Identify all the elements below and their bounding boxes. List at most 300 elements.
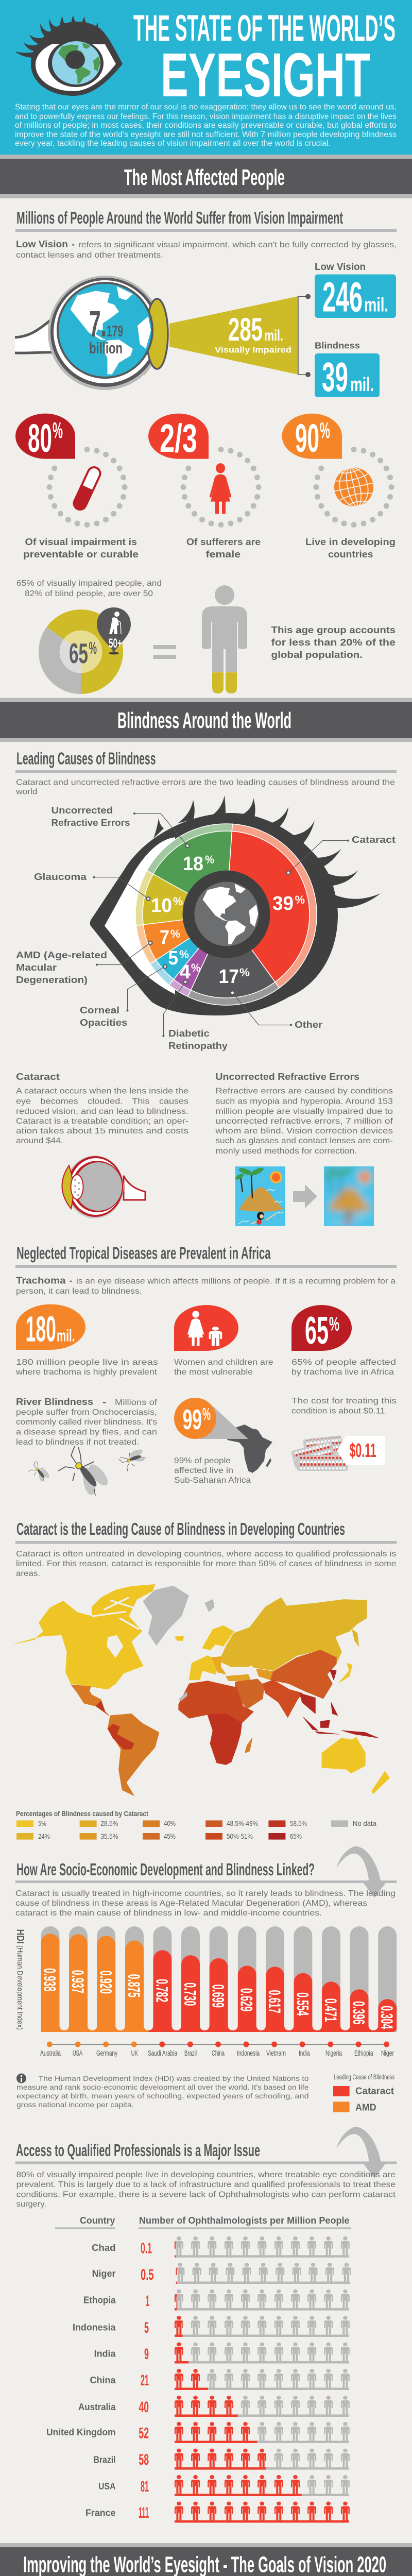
- caption: affected live in: [174, 1466, 233, 1475]
- country labels: [40, 2049, 394, 2058]
- text: socio-economic intro: cataract is the main cause of blindness in low- and middle-income countries.: [15, 1909, 322, 1918]
- label: Diabetic Retinopathy: Retinopathy: [168, 1040, 228, 1051]
- pupil with globe: [182, 871, 270, 958]
- text: leading causes intro: [15, 778, 395, 796]
- row: Indonesia: Indonesia: [73, 2322, 116, 2333]
- text: river blindness: -: [102, 1396, 106, 1407]
- row: Brazil: [94, 2449, 350, 2470]
- HDI values: 0.471: [321, 1998, 340, 2022]
- connector: [298, 294, 311, 377]
- section banner: The Most Affected People: The Most Affected People: [124, 165, 285, 190]
- text: age group share: global population.: [271, 649, 363, 660]
- text: monly used methods for correction.: [215, 1147, 357, 1156]
- note text: measure and rank socio-economic development all over the world. It's based on life: [16, 2083, 309, 2091]
- price tag: $0.11: [350, 1440, 376, 1462]
- text: access intro: [16, 2171, 396, 2209]
- text: access intro: prevalent. This is largely due to a lack of infrastructure and qualified professionals to treat these: [16, 2180, 396, 2189]
- stat: 180 mil: where trachoma is highly prevalent: [15, 1368, 157, 1377]
- image: clear island view: [234, 1166, 285, 1226]
- note text: The Human Development Index (HDI) was created by the United Nations to: [38, 2074, 309, 2082]
- row: Australia: [78, 2396, 350, 2417]
- heading: Access to Qualified Professionals: Access to Qualified Professionals is a Major Issue: [16, 2141, 260, 2160]
- HDI values: 0.938: [41, 1968, 59, 1992]
- caption: female: [206, 549, 241, 560]
- text: river blindness: commonly called river blindness. It's: [16, 1418, 157, 1427]
- percentages: [151, 853, 305, 988]
- country labels: Australia: [40, 2049, 61, 2058]
- panel: Cataract explanation: [16, 1071, 188, 1218]
- country labels: Saudi Arabia: [148, 2049, 177, 2058]
- table header: Country: [80, 2215, 115, 2226]
- row: United Kingdom: [46, 2422, 350, 2443]
- HDI values: [41, 1968, 396, 2029]
- panel: age group: [16, 579, 396, 694]
- row: United Kingdom: United Kingdom: [46, 2427, 115, 2437]
- light cone: visually impaired: [169, 296, 298, 375]
- label: Other: Other: [295, 1019, 322, 1030]
- text: age group share: This age group accounts: [271, 624, 396, 635]
- text: trachoma definition: is an eye disease which affects millions of people. If it is a recurring problem for a: [76, 1277, 396, 1286]
- stat: low vision 246 mil: mil.: [364, 295, 388, 316]
- text: access intro: conditions. For example, there is a severe lack of Ophthalmologists who can perform cataract: [16, 2190, 396, 2199]
- light cone: visually impaired: Visually Impaired: [215, 345, 291, 354]
- dotted ring: [46, 447, 128, 528]
- text: age group share: for less than 20% of the: [271, 637, 396, 648]
- text: eye becomes clouded. This causes: [16, 1097, 188, 1106]
- text: low vision definition: refers to significant visual impairment, which can't be fully corrected by glasses,: [78, 241, 397, 249]
- percentages: %: [239, 966, 250, 979]
- section banner: The Most Affected People: [0, 155, 412, 198]
- heading: Socio-Economic Development: [15, 1846, 397, 1898]
- percentages: 17: [218, 966, 239, 988]
- percentages: 39: [272, 893, 294, 914]
- icon: side-view eye: [15, 276, 168, 390]
- stat: 65% in Africa: %: [329, 1313, 339, 1335]
- intro text: Stating that our eyes are the mirror of our soul is no exaggeration: they allow us to see the world around us,: [15, 103, 397, 112]
- text: cataract map intro: Cataract is often untreated in developing countries, where access to qualified professionals is: [16, 1550, 397, 1558]
- stat: 80% preventable: [15, 414, 139, 560]
- drop: 90%: %: [320, 418, 330, 443]
- stat: low vision 246 mil: 246: [322, 274, 363, 320]
- drop: 90%: [282, 414, 342, 461]
- text: age group share: [271, 624, 396, 660]
- drop: 2/3: 2/3: [160, 416, 197, 461]
- label: AMD: [16, 950, 107, 985]
- label: Corneal Opacities: [80, 1005, 128, 1028]
- intro text: every year, tackling the leading causes of vision impairment all over the world is crucial.: [15, 139, 331, 148]
- row: Indonesia: 5: [144, 2319, 149, 2336]
- HDI values: 0.304: [377, 2006, 396, 2029]
- text: leading causes intro: world: [15, 788, 37, 796]
- row: Chad: Chad: [92, 2242, 115, 2253]
- stat: 180 mil: 180 million people live in areas: [16, 1358, 158, 1367]
- text: [215, 1087, 393, 1156]
- heading: Leading Causes: Leading Causes of Blindness: [16, 749, 156, 768]
- text: Refractive errors are caused by conditions: [215, 1087, 393, 1096]
- text: Cataract is a treatable condition; an oper-: [16, 1117, 188, 1126]
- axis label: (Human Development Index): [15, 1945, 24, 2030]
- timeline dots: [47, 2041, 389, 2047]
- stat: women and children: the most vulnerable: [174, 1368, 253, 1377]
- note text: expectancy at birth, mean years of schooling, expected years of schooling, and: [16, 2092, 309, 2100]
- text: low vision definition: -: [72, 239, 75, 249]
- legend: leading cause of blindness: Cataract: [355, 2086, 394, 2096]
- light cone: visually impaired: 285: [228, 312, 263, 348]
- text: such as myopia and hyperopia. Around 153: [215, 1097, 393, 1106]
- percentages: %: [205, 853, 214, 866]
- caption: [305, 536, 396, 560]
- stat: 99% sub-saharan africa: [174, 1398, 272, 1485]
- country labels: Nigeria: [325, 2049, 342, 2058]
- row: Brazil: Brazil: [94, 2454, 115, 2465]
- row: Niger: Niger: [92, 2268, 115, 2279]
- legend: leading cause of blindness: AMD: [355, 2102, 376, 2112]
- bubble: [174, 1398, 216, 1439]
- HDI values: 0.617: [265, 1990, 284, 2013]
- text: 65% over 50: 65% of visually impaired people, and: [16, 579, 162, 588]
- drop: 90%: 90: [295, 416, 319, 461]
- equals sign: [153, 645, 176, 659]
- beam: [200, 1406, 248, 1439]
- icon: pill: [71, 464, 104, 513]
- legend: cataract percentages: Percentages of Blindness caused by Cataract: [16, 1809, 148, 1818]
- stat: blindness 39 mil: Blindness: [315, 340, 360, 350]
- stat: low vision 246 mil: [315, 262, 396, 320]
- icon: info: [16, 2073, 26, 2083]
- label: AMD: AMD (Age-related: [16, 950, 107, 960]
- percentages: %: [170, 927, 180, 940]
- icon: person with yellow legs: [202, 585, 247, 693]
- stat: 90% developing countries: [282, 414, 396, 560]
- text: socio-economic intro: Cataract is usually treated in high-income countries, so it rarely leads to blindness. The leading: [15, 1889, 396, 1898]
- table header: [55, 2215, 351, 2229]
- labels: 45%: [164, 1832, 176, 1840]
- stat: 65% in Africa: by trachoma live in Africa: [291, 1368, 394, 1377]
- arrow: [293, 1184, 317, 1208]
- arrow: curved: [336, 2127, 386, 2178]
- world population figure: 179: [107, 322, 123, 340]
- labels: 48.5%-49%: [227, 1819, 258, 1827]
- text: low vision definition: [16, 239, 397, 260]
- label: Diabetic Retinopathy: Diabetic: [168, 1028, 210, 1039]
- text: low vision definition: contact lenses and other treatments.: [16, 251, 163, 260]
- stat: 65% in Africa: [291, 1305, 396, 1377]
- heading: Access to Qualified Professionals: [15, 2127, 397, 2178]
- icon: 50+ pin: [97, 607, 131, 654]
- percentages: 4: [179, 961, 191, 983]
- country labels: USA: [73, 2049, 82, 2058]
- panel: header: [0, 0, 412, 155]
- text: river blindness: Millions of: [115, 1398, 158, 1407]
- HDI values: 0.920: [96, 1971, 115, 1994]
- HDI values: 0.875: [125, 1974, 143, 1997]
- swatches: [16, 1820, 348, 1840]
- heading: Cataract: [16, 1071, 60, 1082]
- labels: 58.5%: [290, 1819, 307, 1827]
- percentages: 5: [168, 947, 178, 969]
- stat: 65% in Africa: 65% of people affected: [291, 1358, 396, 1367]
- stat: 2/3 female: [148, 414, 262, 560]
- map: Africa: [227, 1425, 272, 1473]
- legend: leading cause of blindness: [333, 2073, 394, 2112]
- label: Uncorrected Refractive Errors: Uncorrected: [52, 805, 113, 816]
- stat: low vision 246 mil: Low Vision: [315, 262, 366, 273]
- HDI values: 0.699: [209, 1985, 228, 2008]
- text: cataract map intro: areas.: [16, 1569, 40, 1578]
- text: trachoma definition: person, it can lead to blindness.: [16, 1287, 142, 1296]
- intro text: and to powerfully express our feelings. For this reason, vision impairment has a disruptive impact on the lives: [15, 112, 397, 121]
- label: Uncorrected Refractive Errors: Refractive Errors: [52, 817, 130, 828]
- labels: 65%: [290, 1832, 302, 1840]
- labels: 35.5%: [100, 1832, 118, 1840]
- label: AMD: Degeneration): [16, 974, 88, 985]
- text: river blindness: [16, 1396, 158, 1447]
- country labels: Germany: [96, 2049, 117, 2058]
- eyelid and lashes: [90, 795, 381, 1015]
- chart: 65% pie: %: [89, 638, 97, 657]
- labels: 28.5%: [100, 1819, 118, 1827]
- country labels: Niger: [381, 2049, 394, 2058]
- stat: women and children: [174, 1305, 273, 1377]
- text: leading causes intro: Cataract and uncorrected refractive errors are the two leading causes of blindness around the: [16, 778, 395, 787]
- percentages: 10: [151, 895, 172, 917]
- row: China: 21: [141, 2372, 149, 2389]
- text: The cost for treating this: [291, 1397, 397, 1405]
- text: such as glasses and contact lenses are com-: [215, 1137, 393, 1145]
- pie segments outer band: [135, 824, 317, 1005]
- icon: cataract eye: [62, 1156, 145, 1218]
- image: blurred island view: [323, 1166, 374, 1226]
- intro text: of millions of people; in most cases, their conditions are easily preventable or curable, but global efforts to: [15, 121, 397, 130]
- text: river blindness: a disease spread by flies, and can: [16, 1428, 157, 1436]
- HDI values: 0.730: [181, 1982, 199, 2006]
- icon: eye with globe: [15, 15, 123, 96]
- HDI values: 0.554: [293, 1992, 312, 2016]
- row: China: China: [90, 2375, 116, 2385]
- stat: blindness 39 mil: mil.: [350, 374, 374, 396]
- labels: No data: [353, 1819, 376, 1827]
- axis label: HDI: [14, 1929, 26, 1944]
- text: trachoma definition: -: [70, 1275, 72, 1286]
- country labels: UK: [131, 2049, 138, 2058]
- text: trachoma definition: Trachoma: [16, 1275, 66, 1286]
- chart: 65% pie: 65: [69, 637, 88, 669]
- row: France: France: [85, 2507, 115, 2518]
- gaps between bars: [60, 1926, 378, 2030]
- text: cataract map intro: limited. For this reason, cataract is responsible for more than 50% of cases of blindness in some: [16, 1560, 397, 1568]
- text: around $44.: [16, 1137, 63, 1145]
- drop: 80%: [15, 414, 75, 461]
- caption: [23, 536, 139, 560]
- label: Glaucoma: Glaucoma: [34, 871, 87, 882]
- pie segments inner: [143, 831, 310, 998]
- AMD bars: [41, 1934, 148, 2032]
- country labels: Ethiopia: [354, 2049, 373, 2058]
- text: trachoma definition: [16, 1275, 396, 1296]
- stat: treatment cost: [291, 1397, 397, 1471]
- labels: 5%: [38, 1819, 46, 1827]
- chart: 65% pie: [39, 609, 123, 694]
- world population figure: billion: [89, 339, 123, 357]
- text: [291, 1397, 397, 1416]
- table: ophthalmologists per million: [46, 2215, 351, 2522]
- HDI values: 0.937: [68, 1970, 87, 1993]
- HDI values: 0.629: [237, 1988, 256, 2011]
- text: uncorrected refractive errors, 7 million of: [215, 1117, 393, 1126]
- country labels: Brazil: [184, 2049, 197, 2058]
- row: Chad: [92, 2236, 350, 2258]
- label: Corneal Opacities: Corneal: [80, 1005, 119, 1015]
- intro text: [15, 103, 397, 148]
- row: Niger: 0.5: [141, 2266, 153, 2283]
- world population figure: [89, 304, 123, 357]
- section banner: Improving the World's Eyesight: [0, 2543, 412, 2576]
- labels: 24%: [38, 1832, 50, 1840]
- caption: preventable or curable: [23, 549, 139, 560]
- price tag: [337, 1436, 385, 1465]
- arrow: curved: [336, 1846, 386, 1898]
- light cone: visually impaired: mil.: [264, 327, 283, 344]
- text: river blindness: River Blindness: [16, 1396, 93, 1407]
- percentages: 7: [160, 927, 169, 948]
- country labels: Vietnam: [266, 2049, 286, 2058]
- bubble: %: [202, 1404, 211, 1423]
- row: Chad: 0.1: [141, 2240, 152, 2257]
- legend: cataract percentages: [16, 1809, 376, 1840]
- text: condition is about $0.11: [291, 1406, 385, 1416]
- icon: wire globe: [331, 464, 377, 511]
- labels: [38, 1819, 376, 1840]
- row: Australia: 40: [139, 2399, 149, 2416]
- caption: Sub-Saharan Africa: [174, 1476, 251, 1485]
- caption: Live in developing: [305, 536, 396, 547]
- bubble: 99: [183, 1403, 202, 1435]
- label: Corneal Opacities: Opacities: [80, 1017, 128, 1028]
- row: United Kingdom: 52: [139, 2425, 149, 2442]
- background columns: [41, 1926, 397, 2032]
- row: Ethopia: Ethopia: [83, 2295, 116, 2305]
- row: USA: 81: [141, 2478, 149, 2495]
- heading: Leading Causes: [15, 749, 397, 773]
- table header: Number of Ophthalmologists per Million People: [139, 2215, 350, 2226]
- diagram: world population eye: [15, 262, 396, 400]
- intro text: improve the state of the world’s eyesight are still not sufficient. With 7 million people developing blindness: [15, 130, 397, 139]
- stat: 180 mil: [15, 1304, 158, 1377]
- percentages: %: [173, 895, 183, 908]
- text: 65% over 50: [16, 579, 162, 598]
- caption: Of sufferers are: [186, 536, 261, 547]
- stat: 180 mil: mil.: [57, 1326, 75, 1345]
- row: India: India: [94, 2348, 116, 2359]
- percentages: %: [179, 948, 189, 961]
- map: world cataract blindness: [14, 1584, 389, 1795]
- caption: Of visual impairment is: [25, 536, 137, 547]
- row: Niger: [92, 2263, 351, 2284]
- note text: gross national income per capita.: [16, 2100, 134, 2109]
- icon: woman and child: [187, 1311, 222, 1346]
- text: reduced vision, and can lead to blindness.: [16, 1107, 188, 1116]
- dotted ring: [313, 447, 394, 528]
- country labels: China: [212, 2049, 225, 2058]
- text: [16, 1087, 188, 1145]
- text: 65% over 50: 82% of blind people, are over 50: [25, 589, 153, 598]
- stat: women and children: Women and children are: [174, 1358, 273, 1367]
- text: low vision definition: Low Vision: [16, 239, 68, 249]
- row: India: 9: [144, 2346, 149, 2363]
- row: France: 111: [139, 2504, 149, 2521]
- label: Uncorrected Refractive Errors: [52, 805, 130, 828]
- chart: eye-shaped pie of causes of blindness: [16, 795, 396, 1051]
- icon: flies: [28, 1442, 148, 1496]
- percentages: 18: [183, 853, 203, 875]
- drop: 2/3: [148, 414, 209, 461]
- row: India: [94, 2342, 350, 2364]
- icon: 50+ pin: 50+: [109, 636, 122, 651]
- chart: HDI bars: [14, 1926, 397, 2058]
- text: A cataract occurs when the lens inside the: [16, 1087, 188, 1096]
- stat: 65% in Africa: 65: [305, 1309, 329, 1352]
- row: USA: USA: [98, 2481, 115, 2492]
- HDI values: 0.396: [350, 2001, 368, 2025]
- caption: countries: [328, 549, 373, 560]
- text: socio-economic intro: cause of blindness in these areas is Age-Related Macular Degeneration (AMD), whereas: [15, 1899, 367, 1908]
- country labels: India: [299, 2049, 310, 2058]
- text: river blindness: lead to blindness if not treated.: [16, 1438, 139, 1447]
- percentages: %: [295, 893, 305, 906]
- row: Ethopia: [83, 2290, 350, 2311]
- text: access intro: 80% of visually impaired people live in developing countries, where treatable eye conditions are: [16, 2171, 396, 2179]
- drop: 80%: 80: [28, 416, 52, 461]
- note: HDI explanation: [16, 2073, 309, 2109]
- axis label: [14, 1929, 26, 2030]
- row: Ethopia: 1: [146, 2293, 149, 2310]
- stat: 180 mil: 180: [26, 1309, 56, 1349]
- caption: 99% of people: [174, 1456, 231, 1465]
- caption: [186, 536, 261, 560]
- caption: [174, 1456, 251, 1485]
- label: AMD: Macular: [16, 962, 57, 973]
- heading: Uncorrected Refractive Errors: [215, 1071, 359, 1082]
- label: Cataract: Cataract: [352, 834, 396, 845]
- labels: 50%-51%: [227, 1832, 253, 1840]
- text: river blindness: people suffer from Onchocerciasis,: [16, 1408, 157, 1417]
- dotted ring: [180, 447, 262, 528]
- panel: Uncorrected Refractive Errors explanation: [215, 1071, 393, 1226]
- text: access intro: surgery.: [16, 2200, 46, 2209]
- icon: blister packs: [291, 1435, 348, 1471]
- stat: blindness 39 mil: 39: [322, 354, 348, 400]
- row: Brazil: 58: [139, 2451, 149, 2468]
- row: Australia: Australia: [78, 2401, 116, 2412]
- row: Indonesia: [73, 2316, 350, 2337]
- percentages: %: [191, 961, 200, 974]
- section banner: Blindness Around the World: [0, 698, 412, 742]
- cataract bars: [148, 1950, 397, 2032]
- icon: woman: [210, 463, 231, 514]
- text: socio-economic intro: [15, 1889, 396, 1918]
- drop: 80%: %: [53, 418, 63, 443]
- label: Diabetic Retinopathy: [168, 1028, 228, 1051]
- stat: blindness 39 mil: [315, 340, 380, 400]
- text: cataract map intro: [16, 1550, 397, 1578]
- text: million people are visually impaired due to: [215, 1107, 393, 1116]
- title: [133, 8, 396, 110]
- row: China: [90, 2369, 350, 2390]
- text: ation takes about 15 minutes and costs: [16, 1127, 188, 1136]
- text: whom are blind. Vision correction devices: [215, 1127, 393, 1136]
- row: France: [85, 2502, 350, 2522]
- country labels: Indonesia: [237, 2049, 260, 2058]
